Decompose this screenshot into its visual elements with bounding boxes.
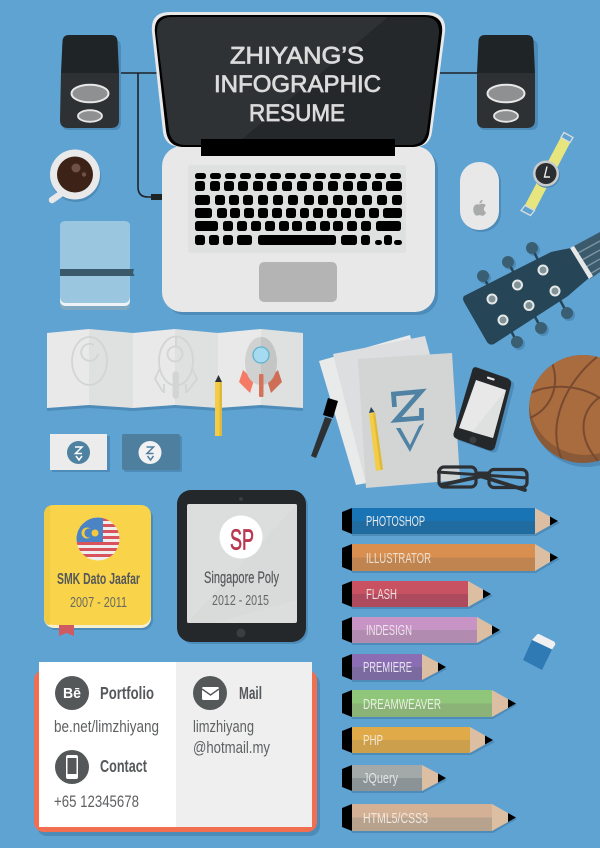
book: SMK Dato Jaafar (44, 505, 153, 636)
hinge (201, 139, 395, 156)
laptop (152, 12, 445, 315)
mail address (193, 718, 271, 757)
sketch: rocket outline (155, 336, 197, 398)
title: ZHIYANG’S (230, 42, 364, 70)
pencil: Flash: FLASH (366, 586, 397, 603)
pencil: Premiere (342, 654, 447, 682)
pencil: InDesign (342, 617, 502, 645)
ZV logo (394, 392, 424, 452)
smartphone (453, 367, 514, 453)
school name: SMK Dato Jaafar (57, 571, 140, 588)
trackpad (259, 262, 337, 302)
icon: mail (193, 676, 227, 710)
title: INFOGRAPHIC (214, 71, 381, 98)
pencil: Photoshop (342, 508, 560, 536)
sketch: egg outline (72, 337, 107, 385)
pencil: InDesign: INDESIGN (366, 622, 412, 639)
mail address: @hotmail.my (193, 739, 271, 757)
eyeglasses (437, 467, 528, 490)
folded map with rocket sketches (47, 329, 303, 411)
contact heading: Contact (100, 756, 147, 776)
icon: phone (55, 750, 89, 784)
pencil: Illustrator: ILLUSTRATOR (366, 550, 431, 567)
poly years: 2012 - 2015 (212, 593, 269, 609)
left speaker (60, 35, 121, 130)
poly name: Singapore Poly (204, 569, 279, 587)
rocket illustration (239, 337, 282, 397)
pencil: Dreamweaver: DREAMWEAVER (363, 696, 441, 713)
pencil: HTML5/CSS3 (342, 804, 517, 833)
malaysia flag (76, 517, 120, 561)
portfolio url: be.net/limzhiyang (54, 718, 159, 736)
pencil: HTML5/CSS3: HTML5/CSS3 (363, 810, 428, 827)
mail address: limzhiyang (193, 718, 254, 736)
notebook (60, 221, 134, 310)
pencil: Illustrator (342, 544, 560, 573)
coffee cup (50, 150, 101, 202)
pencil: JQuery: JQuery (363, 770, 398, 787)
pencil: PHP (342, 727, 495, 755)
cables (118, 73, 478, 200)
keyboard (188, 165, 406, 253)
yellow pencil on map (215, 375, 222, 436)
black pen (311, 398, 338, 458)
bookmark (59, 625, 74, 636)
watch (521, 132, 573, 216)
pencil: Flash (342, 581, 493, 609)
pencil: PHP: PHP (363, 732, 383, 749)
business card: light (50, 434, 110, 472)
yellow pencil on paper (369, 407, 383, 471)
laptop base (165, 149, 438, 315)
icon: behance: Bē (63, 686, 81, 702)
basketball (529, 343, 600, 467)
pencil: Dreamweaver (342, 690, 517, 719)
icon: behance (55, 676, 89, 710)
school years: 2007 - 2011 (70, 595, 127, 611)
mail heading: Mail (239, 683, 262, 703)
phone number: +65 12345678 (54, 793, 139, 811)
guitar headstock (463, 232, 600, 350)
laptop screen (152, 12, 445, 147)
SP logo (220, 516, 262, 558)
tablet: Singapore Poly (177, 490, 308, 644)
title (214, 42, 381, 127)
pencil: JQuery (342, 765, 447, 793)
pencil: Photoshop: PHOTOSHOP (366, 513, 425, 530)
eraser (523, 634, 555, 670)
contact panel (34, 662, 320, 836)
right speaker (477, 35, 538, 130)
stack of papers (319, 335, 460, 488)
pencil: Premiere: PREMIERE (363, 659, 412, 676)
mouse (460, 162, 501, 232)
portfolio heading: Portfolio (100, 683, 154, 703)
title: RESUME (249, 100, 345, 127)
business card: blue (122, 434, 182, 472)
SP logo: SP (230, 524, 254, 556)
